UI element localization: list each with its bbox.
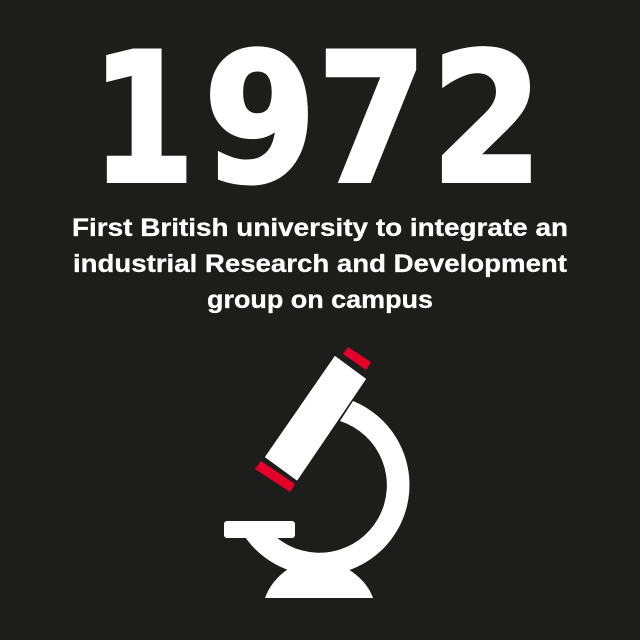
title: year 1972 <box>91 16 543 224</box>
description text: group on campus <box>207 286 433 314</box>
microscope stage <box>224 521 295 538</box>
title: year 1972: 9 <box>204 16 316 224</box>
description text: industrial Research and Development <box>73 250 568 278</box>
title: year 1972: 7 <box>317 16 427 224</box>
title: year 1972: 1 <box>91 16 195 224</box>
red eyepiece band <box>343 347 371 370</box>
description text: First British university to integrate an <box>72 214 568 242</box>
red objective band <box>255 461 295 492</box>
title: year 1972: 2 <box>431 16 543 224</box>
microscope arm <box>245 401 409 575</box>
microscope tube <box>266 356 366 480</box>
icon: microscope <box>224 347 409 598</box>
microscope base <box>265 569 373 598</box>
description text <box>72 214 568 314</box>
